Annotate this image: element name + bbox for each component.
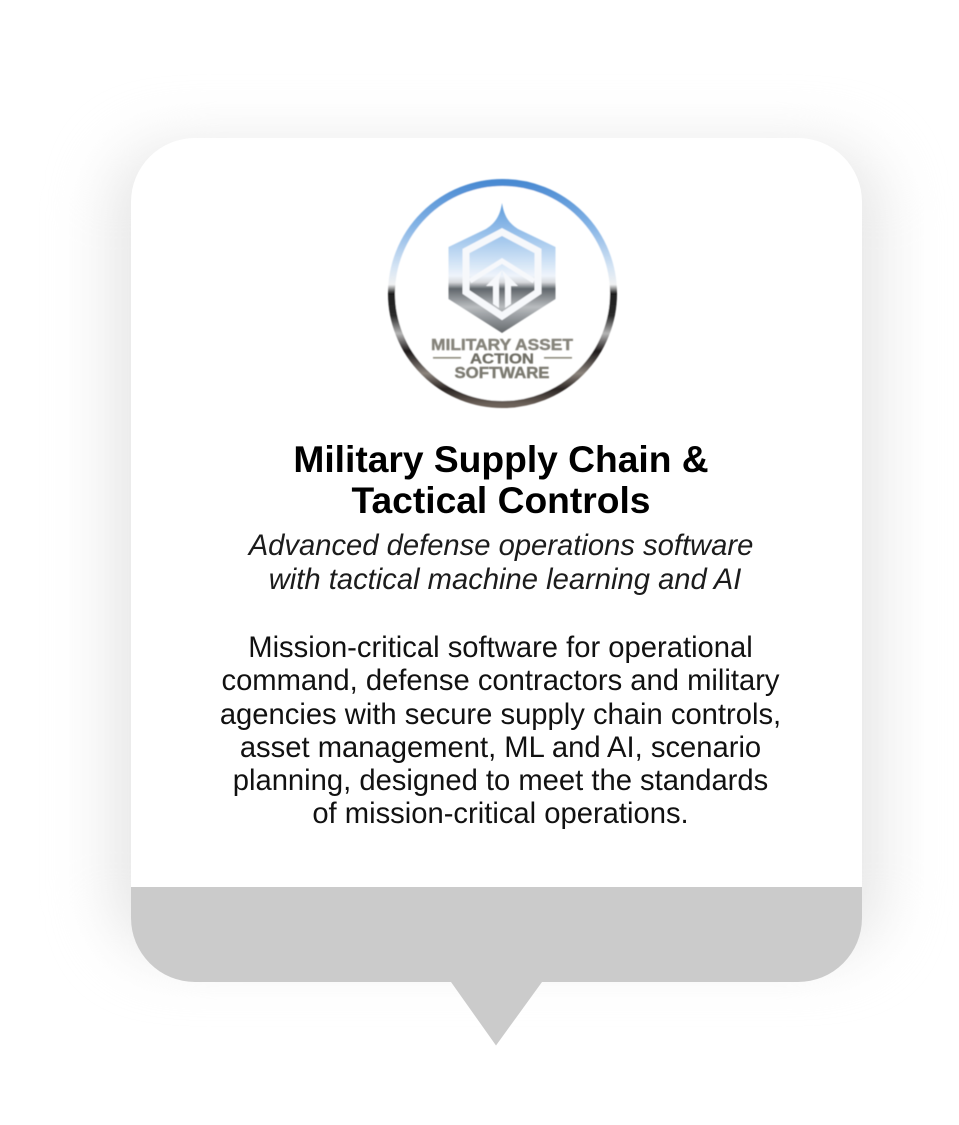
- title: Tactical Controls: [352, 478, 650, 520]
- logo wordmark: [431, 337, 573, 382]
- callout pointer arrow: [451, 982, 542, 1046]
- logo wordmark: ACTION: [470, 352, 534, 368]
- subtitle: Advanced defense operations software: [249, 530, 753, 562]
- callout card: [131, 138, 862, 982]
- icon: military asset action software logo: [387, 178, 618, 409]
- title: Military Supply Chain &: [293, 438, 709, 480]
- logo emblem: [448, 203, 556, 333]
- logo wordmark: SOFTWARE: [454, 365, 550, 382]
- card shadow: [111, 146, 882, 955]
- grey footer band: [131, 887, 862, 982]
- logo wordmark: MILITARY ASSET: [431, 337, 573, 354]
- body description: of mission-critical operations.: [312, 798, 689, 830]
- body description: agencies with secure supply chain controls,: [220, 699, 781, 731]
- logo ring: [392, 182, 614, 404]
- body description: planning, designed to meet the standards: [233, 765, 768, 797]
- body description: Mission-critical software for operational: [248, 632, 753, 664]
- title: [293, 438, 709, 520]
- body description: asset management, ML and AI, scenario: [240, 732, 761, 764]
- subtitle: [247, 530, 753, 596]
- subtitle: with tactical machine learning and AI: [269, 564, 741, 596]
- body description: [220, 632, 781, 830]
- body description: command, defense contractors and military: [221, 665, 780, 697]
